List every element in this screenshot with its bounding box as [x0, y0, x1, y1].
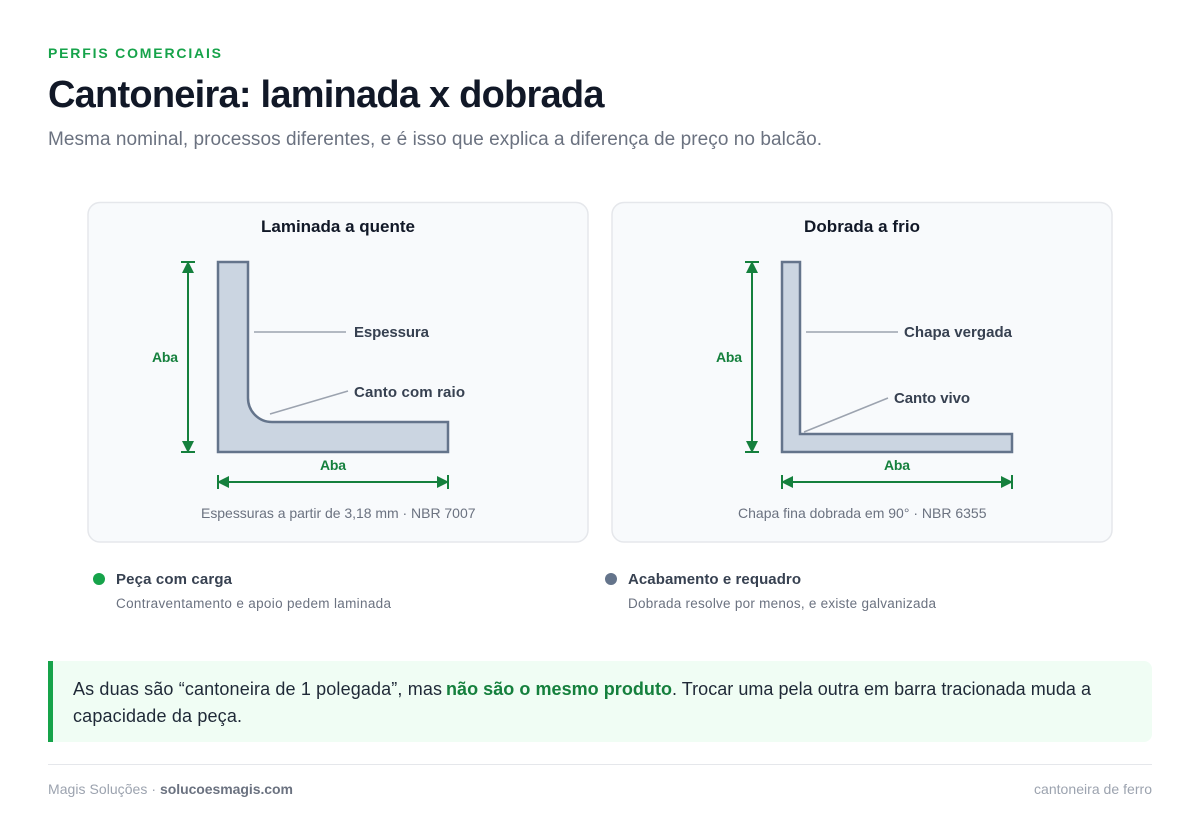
caption: dobrada: Chapa fina dobrada em 90° · NBR 6355 [738, 505, 987, 521]
callout: key takeaway [48, 661, 1152, 742]
dimension: vertical leg [152, 261, 195, 453]
callout: canto vivo: Canto vivo [894, 390, 970, 407]
diagram: angle profile with rounded corner [218, 262, 448, 452]
dimension: vertical leg: Aba [716, 349, 742, 365]
panel: laminada a quente [88, 202, 588, 542]
title: Cantoneira: laminada x dobrada [48, 74, 605, 116]
callout: key takeaway: não são o mesmo produto [446, 679, 672, 699]
callout: key takeaway: As duas são “cantoneira de 1 polegada”, mas [73, 679, 442, 699]
callout: canto com raio [270, 384, 465, 414]
footer source [48, 781, 293, 797]
legend: acabamento e requadro [605, 571, 936, 611]
panel: dobrada a frio [612, 202, 1112, 542]
dimension: horizontal leg: Aba [320, 457, 346, 473]
panel heading: laminada: Laminada a quente [261, 217, 415, 236]
callout: canto vivo [804, 390, 970, 432]
dimension: horizontal leg [781, 457, 1013, 489]
legend: peça com carga: Peça com carga [116, 571, 233, 588]
legend: peça com carga [93, 571, 391, 611]
callout: key takeaway: . Trocar uma pela outra em barra tracionada muda a [672, 679, 1092, 699]
callout: espessura: Espessura [354, 324, 430, 341]
subtitle: Mesma nominal, processos diferentes, e é isso que explica a diferença de preço no balcão. [48, 129, 822, 150]
dimension: vertical leg [716, 261, 759, 453]
dimension: vertical leg: Aba [152, 349, 178, 365]
eyebrow: PERFIS COMERCIAIS [48, 45, 221, 61]
dimension: horizontal leg [217, 457, 449, 489]
diagram: angle profile with sharp corner [782, 262, 1012, 452]
header [48, 45, 822, 150]
legend: acabamento e requadro: Acabamento e requadro [628, 571, 801, 588]
caption: laminada: Espessuras a partir de 3,18 mm · NBR 7007 [201, 505, 476, 521]
footer topic: cantoneira de ferro [1034, 781, 1152, 797]
panel heading: dobrada: Dobrada a frio [804, 217, 920, 236]
callout: canto com raio: Canto com raio [354, 384, 465, 401]
footer source: solucoesmagis.com [160, 781, 293, 797]
legend: peça com carga: Contraventamento e apoio pedem laminada [116, 596, 391, 611]
dimension: horizontal leg: Aba [884, 457, 910, 473]
callout: key takeaway: capacidade da peça. [73, 706, 242, 726]
footer [48, 764, 1152, 797]
footer source: Magis Soluções · [48, 781, 156, 797]
legend: acabamento e requadro: Dobrada resolve por menos, e existe galvanizada [628, 596, 936, 611]
callout: chapa vergada: Chapa vergada [904, 324, 1013, 341]
